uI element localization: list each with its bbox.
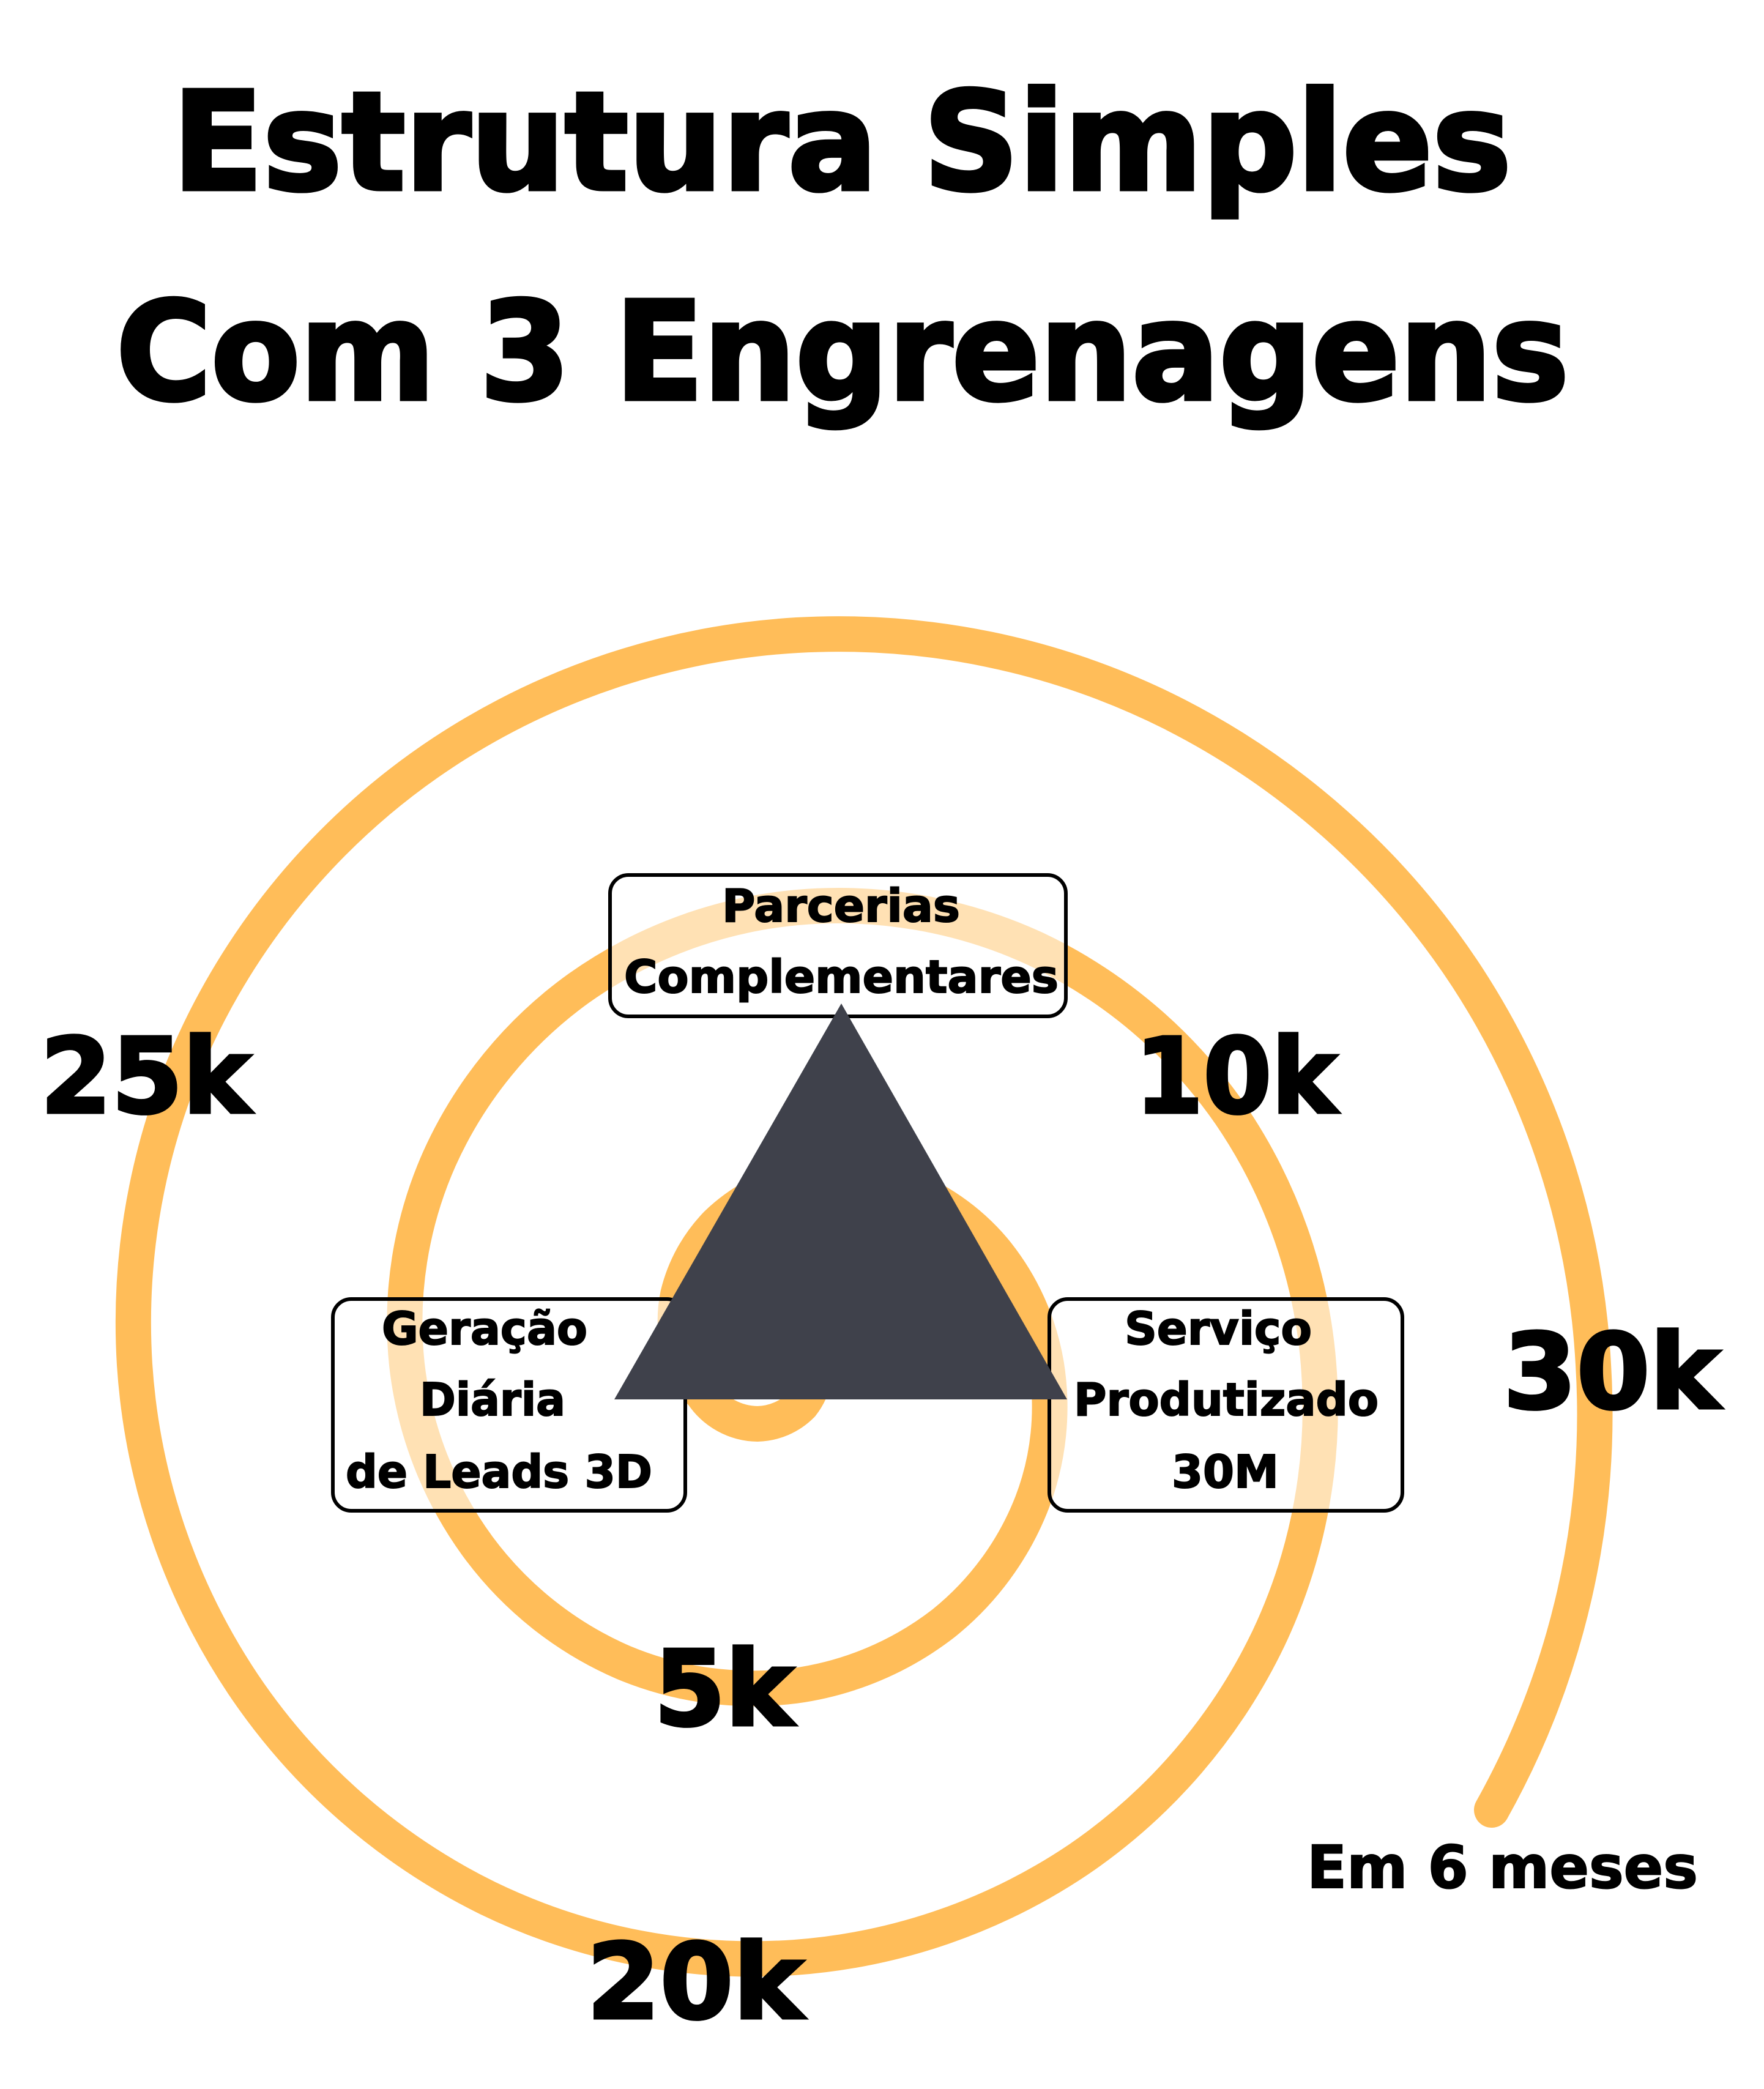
label: 5k: 5k: [654, 1629, 796, 1750]
box: Geração Diária de Leads 3D: Geração: [382, 1303, 587, 1355]
box: Serviço Produtizado 30M: Produtizado: [1074, 1374, 1379, 1426]
label: 10k: 10k: [1135, 1016, 1339, 1138]
label: 30k: 30k: [1503, 1312, 1722, 1433]
spiral growth line: [133, 634, 1595, 1959]
title: Com 3 Engrenagens: [116, 274, 1569, 431]
title: Estrutura Simples: [173, 64, 1511, 222]
label: 25k: 25k: [40, 1016, 253, 1138]
box: Serviço Produtizado 30M: [1049, 1299, 1402, 1511]
box: Parcerias Complementares: [610, 875, 1066, 1016]
box: Serviço Produtizado 30M: 30M: [1172, 1446, 1279, 1499]
box: Geração Diária de Leads 3D: [333, 1299, 685, 1511]
label: 20k: 20k: [587, 1922, 806, 2043]
box: Parcerias Complementares: Parcerias: [722, 880, 960, 933]
box: Geração Diária de Leads 3D: de Leads 3D: [346, 1446, 652, 1499]
box: Serviço Produtizado 30M: Serviço: [1125, 1303, 1312, 1355]
box: Parcerias Complementares: Complementares: [624, 951, 1059, 1004]
central triangle: [614, 1004, 1067, 1399]
caption: Em 6 meses: Em 6 meses: [1307, 1833, 1698, 1902]
box: Geração Diária de Leads 3D: Diária: [420, 1374, 565, 1426]
title: [116, 64, 1569, 431]
